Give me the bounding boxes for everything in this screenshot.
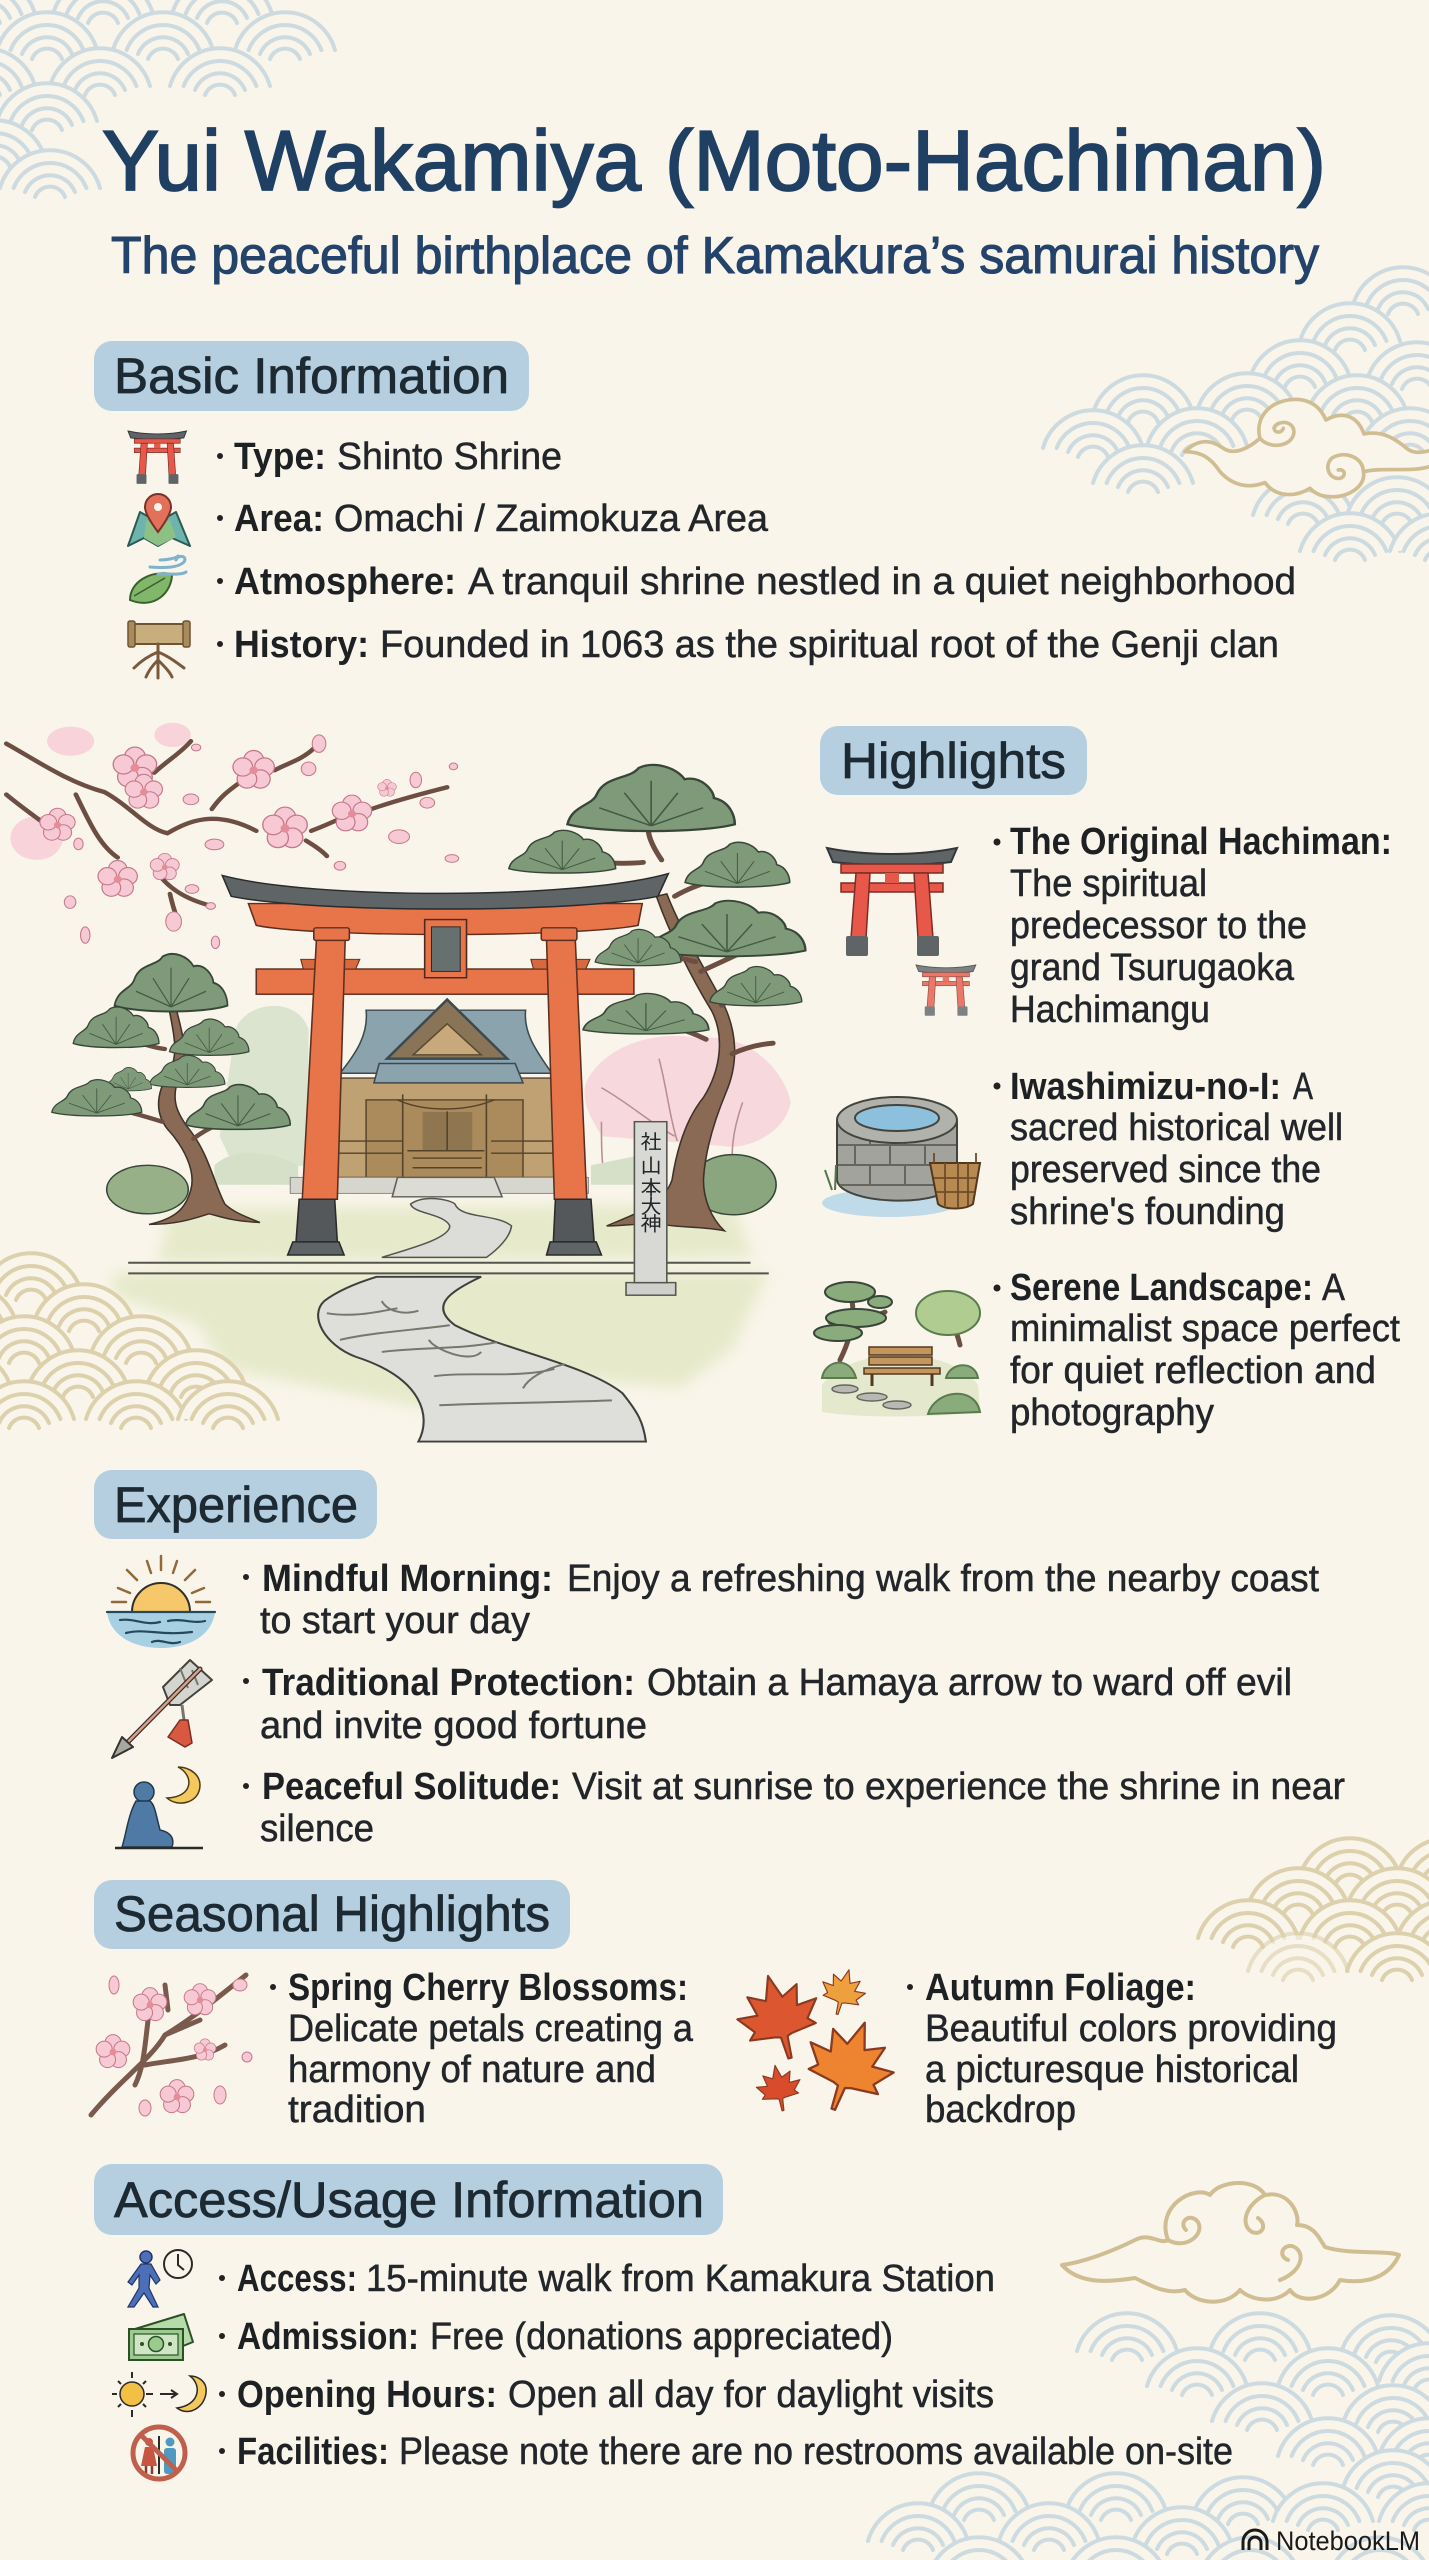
icon: no restrooms	[132, 2426, 186, 2480]
item: traditional protection	[112, 1660, 1292, 1758]
stone marker: 本	[641, 1177, 662, 1199]
row: atmosphere: A tranquil shrine nestled in a quiet neighborhood	[468, 561, 1296, 603]
heading: basic information: Basic Information	[114, 348, 509, 404]
panel: experience	[94, 1470, 1345, 1850]
item: the original hachiman: predecessor to the	[1010, 905, 1307, 947]
item: the original hachiman: Hachimangu	[1010, 989, 1210, 1031]
item: iwashimizu-no-i	[822, 1066, 1343, 1233]
item: the original hachiman: The spiritual	[1010, 863, 1207, 905]
item: iwashimizu-no-i: preserved since the	[1010, 1149, 1321, 1191]
item: mindful morning	[107, 1556, 1319, 1648]
item: peaceful solitude: silence	[260, 1808, 374, 1850]
row: type	[128, 431, 562, 484]
item: mindful morning: Enjoy a refreshing walk from the nearby coast	[567, 1558, 1319, 1600]
item: mindful morning: Mindful Morning:	[262, 1558, 553, 1600]
item: autumn foliage: Autumn Foliage:	[925, 1967, 1196, 2009]
decoration: bottom-right blue waves and gold cloud	[868, 2183, 1429, 2560]
panel: highlights	[814, 726, 1400, 1434]
panel: basic information	[94, 341, 1296, 678]
title: Yui Wakamiya (Moto-Hachiman)	[102, 114, 1326, 209]
left pine tree	[52, 954, 290, 1224]
item: the original hachiman	[827, 821, 1392, 1031]
row: admission	[129, 2314, 893, 2360]
item: spring cherry blossoms: tradition	[288, 2089, 426, 2131]
row: opening hours: Open all day for daylight visits	[508, 2374, 994, 2416]
stone marker: 山	[641, 1155, 662, 1177]
icon: garden with bench	[814, 1282, 980, 1416]
item: peaceful solitude: Visit at sunrise to experience the shrine in near	[572, 1766, 1345, 1808]
torii gate	[222, 874, 668, 1255]
NotebookLM badge: NotebookLM	[1276, 2526, 1420, 2556]
row: area: Area:	[234, 498, 324, 540]
item: spring cherry blossoms: harmony of nature and	[288, 2049, 656, 2091]
icon: torii	[128, 431, 186, 484]
heading: highlights	[820, 726, 1087, 795]
icon: walking person and clock	[128, 2250, 192, 2307]
item: serene landscape: minimalist space perfect	[1010, 1308, 1400, 1350]
item: autumn foliage	[729, 1964, 1337, 2131]
icon: sunrise over water	[107, 1556, 215, 1648]
item: spring cherry blossoms: Spring Cherry Blossoms:	[288, 1967, 688, 2009]
item: iwashimizu-no-i: Iwashimizu-no-I:	[1010, 1066, 1281, 1108]
item: mindful morning: to start your day	[260, 1600, 530, 1642]
lower stone path	[318, 1277, 646, 1442]
item: iwashimizu-no-i: sacred historical well	[1010, 1107, 1343, 1149]
item: the original hachiman: grand Tsurugaoka	[1010, 947, 1295, 989]
item: spring cherry blossoms	[91, 1967, 694, 2131]
background trees	[214, 1006, 791, 1185]
stone marker	[626, 1122, 676, 1295]
item: serene landscape: for quiet reflection and	[1010, 1350, 1376, 1392]
item: traditional protection: Obtain a Hamaya arrow to ward off evil	[647, 1662, 1292, 1704]
icon: scroll and roots	[128, 621, 190, 678]
row: history	[128, 621, 1279, 678]
item: serene landscape: photography	[1010, 1392, 1214, 1434]
row: atmosphere: Atmosphere:	[234, 561, 456, 603]
icon: leaf and wind	[130, 556, 186, 603]
item: peaceful solitude: Peaceful Solitude:	[262, 1766, 561, 1808]
item: iwashimizu-no-i: shrine's founding	[1010, 1191, 1285, 1233]
row: admission: Admission:	[237, 2316, 419, 2358]
shrine building	[290, 1000, 588, 1197]
item: autumn foliage: Beautiful colors providing	[925, 2008, 1337, 2050]
decoration: lower-left gold waves	[0, 1253, 278, 1428]
decoration: top-left blue waves	[0, 0, 335, 197]
item: serene landscape	[814, 1267, 1400, 1434]
row: history: History:	[234, 624, 369, 666]
row: type: Type:	[234, 436, 326, 478]
icon: banknotes	[129, 2314, 193, 2360]
row: access	[128, 2250, 995, 2307]
row: access: 15-minute walk from Kamakura Station	[366, 2258, 995, 2300]
panel: seasonal highlights	[91, 1880, 1337, 2131]
road lines	[128, 1263, 769, 1273]
decoration: upper-right blue waves and gold cloud	[1043, 267, 1429, 560]
icon: cherry blossom branch	[91, 1975, 252, 2116]
icon: meditating figure and moon	[115, 1767, 203, 1848]
heading: seasonal highlights: Seasonal Highlights	[114, 1886, 550, 1942]
row: atmosphere	[130, 556, 1296, 603]
heading: experience: Experience	[114, 1477, 358, 1533]
decoration: mid-right gold waves	[1198, 1838, 1429, 1980]
item: serene landscape: Serene Landscape:	[1010, 1267, 1313, 1309]
icon: maple leaves	[729, 1964, 906, 2124]
icon: large and small torii	[827, 848, 976, 1016]
icon: map pin	[128, 494, 190, 546]
icon: hamaya arrow	[112, 1660, 212, 1758]
stone marker: 神	[641, 1213, 662, 1236]
item: autumn foliage: backdrop	[925, 2089, 1076, 2131]
right pine tree	[509, 765, 805, 1231]
panel: access and usage information	[94, 2164, 1233, 2480]
heading: highlights: Highlights	[841, 733, 1066, 789]
item: peaceful solitude	[115, 1766, 1345, 1850]
item: autumn foliage: a picturesque historical	[925, 2049, 1299, 2091]
item: serene landscape: A	[1322, 1267, 1346, 1309]
icon: stone well with bucket	[822, 1097, 980, 1217]
grass washes	[112, 1204, 769, 1417]
upper stone path	[382, 1198, 511, 1257]
item: the original hachiman: The Original Hachiman:	[1010, 821, 1392, 863]
item: iwashimizu-no-i: A	[1293, 1066, 1314, 1108]
row: facilities	[132, 2426, 1233, 2480]
icon: sun to moon	[112, 2372, 206, 2417]
row: admission: Free (donations appreciated)	[430, 2316, 893, 2358]
row: facilities: Please note there are no restrooms available on-site	[399, 2431, 1233, 2473]
row: opening hours	[112, 2372, 994, 2417]
cherry branch	[6, 723, 459, 949]
row: history: Founded in 1063 as the spiritual root of the Genji clan	[380, 624, 1279, 666]
row: area	[128, 494, 769, 546]
item: spring cherry blossoms: Delicate petals creating a	[288, 2008, 694, 2050]
item: traditional protection: Traditional Protection:	[262, 1662, 635, 1704]
stone marker: 大	[641, 1196, 662, 1218]
illustration: torii gate, shrine and garden	[6, 723, 805, 1442]
heading: access/usage information: Access/Usage Information	[114, 2172, 704, 2228]
row: area: Omachi / Zaimokuza Area	[334, 498, 769, 540]
row: facilities: Facilities:	[237, 2431, 389, 2473]
stone marker: 社	[641, 1131, 662, 1153]
item: traditional protection: and invite good fortune	[260, 1705, 647, 1747]
row: type: Shinto Shrine	[337, 436, 562, 478]
subtitle: The peaceful birthplace of Kamakura’s samurai history	[111, 227, 1319, 285]
row: access: Access:	[237, 2258, 357, 2300]
row: opening hours: Opening Hours:	[237, 2374, 497, 2416]
